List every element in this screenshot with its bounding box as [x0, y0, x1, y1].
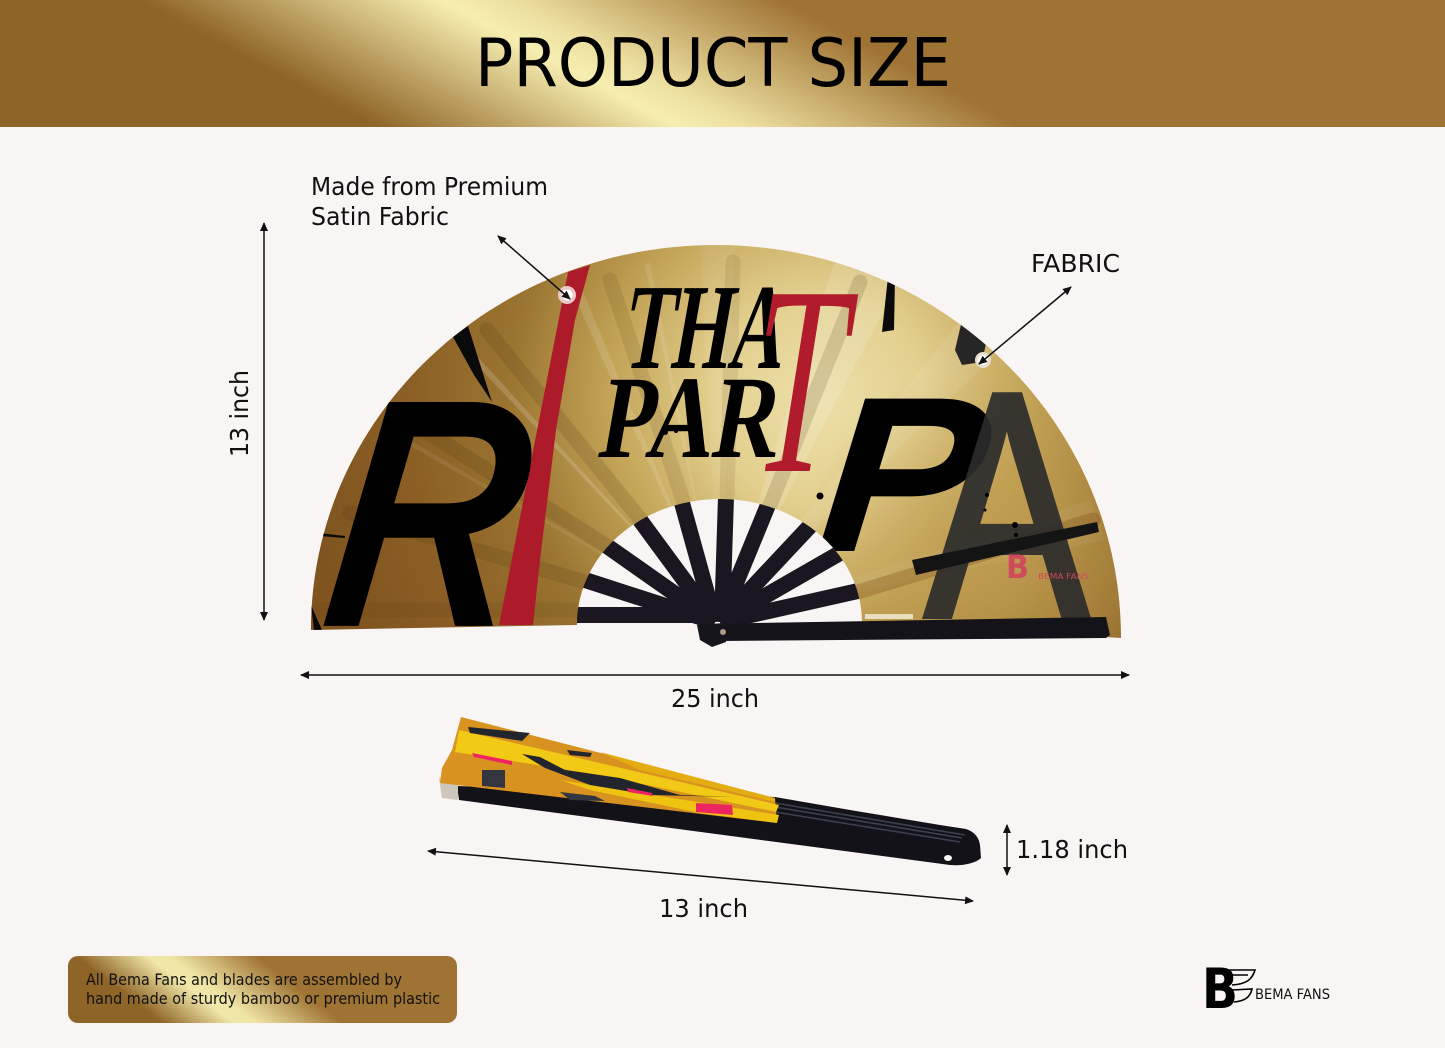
- folded fan black guard and ribs: [457, 786, 981, 865]
- brush letter red T: T: [733, 230, 871, 530]
- note text: All Bema Fans and blades are assembled by: [86, 970, 402, 989]
- brand logo: [1202, 957, 1330, 1021]
- fabric hole right: [975, 352, 991, 368]
- folded fan: [439, 717, 981, 865]
- open fan: [311, 245, 1121, 647]
- fan fabric: [311, 245, 1121, 638]
- logo mark: B: [1202, 957, 1238, 1021]
- brush mark top: [882, 277, 895, 332]
- fan pivot: [697, 623, 726, 647]
- callout: premium satin fabric: Satin Fabric: [311, 202, 449, 231]
- small pink logo: BEMA FANS: [1038, 572, 1089, 581]
- fan ribs: [577, 497, 858, 622]
- arrow: folded length: [428, 851, 973, 901]
- brush mark bottom left corner: [311, 605, 322, 630]
- rib shadows showing through fabric: [320, 262, 1093, 610]
- label: 25 inch: 25 inch: [671, 684, 759, 713]
- brush letter R: R: [314, 342, 549, 686]
- note text: hand made of sturdy bamboo or premium plastic: [86, 989, 440, 1008]
- brush mark upper left: [453, 326, 492, 402]
- arrow: width 25 inch: [301, 674, 1129, 676]
- label: 13 inch height: 13 inch: [225, 370, 254, 457]
- arrow: to left fabric hole: [498, 236, 570, 299]
- beige strip above guard: [865, 614, 913, 619]
- label: 1.18 inch: 1.18 inch: [1016, 835, 1128, 864]
- brush mark left thin line: [323, 534, 345, 538]
- brush letter P: P: [795, 360, 1021, 589]
- title: PRODUCT SIZE: [475, 24, 951, 102]
- pink print marks: [696, 803, 733, 815]
- brush crossbar: [912, 522, 1099, 575]
- arrow: to right fabric hole: [979, 287, 1071, 364]
- dark print marks: [468, 727, 530, 741]
- guard hole: [944, 855, 952, 861]
- pivot rivet: [720, 629, 726, 635]
- callout: premium satin fabric: Made from Premium: [311, 172, 548, 201]
- small pink logo: [1008, 554, 1088, 579]
- brush dot: [816, 492, 824, 500]
- rib highlights: [775, 803, 965, 842]
- logo wordmark: BEMA FANS: [1255, 987, 1330, 1003]
- red stripe: [499, 265, 590, 625]
- arrow: height 13 inch: [263, 223, 265, 620]
- fabric shadow end: [439, 778, 458, 800]
- fabric hole left: [558, 286, 576, 304]
- note box: [68, 956, 457, 1023]
- arrow: thickness: [1006, 825, 1008, 875]
- folded fabric orange base: [440, 717, 777, 823]
- brush word PAR: PAR: [591, 352, 793, 483]
- fan handle guard: [700, 617, 1110, 641]
- brush letter A grey: A: [926, 327, 1088, 683]
- header banner: [0, 0, 1445, 127]
- brush blob near fabric hole: [955, 325, 986, 365]
- label: 13 inch length: 13 inch: [659, 894, 748, 923]
- small pink logo: B: [1006, 548, 1029, 586]
- yellow folds: [455, 730, 779, 812]
- callout: fabric: FABRIC: [1031, 249, 1120, 278]
- fabric light folds: [411, 245, 1104, 568]
- paint splatters: [664, 431, 1018, 537]
- brush word THA: THA: [615, 259, 799, 395]
